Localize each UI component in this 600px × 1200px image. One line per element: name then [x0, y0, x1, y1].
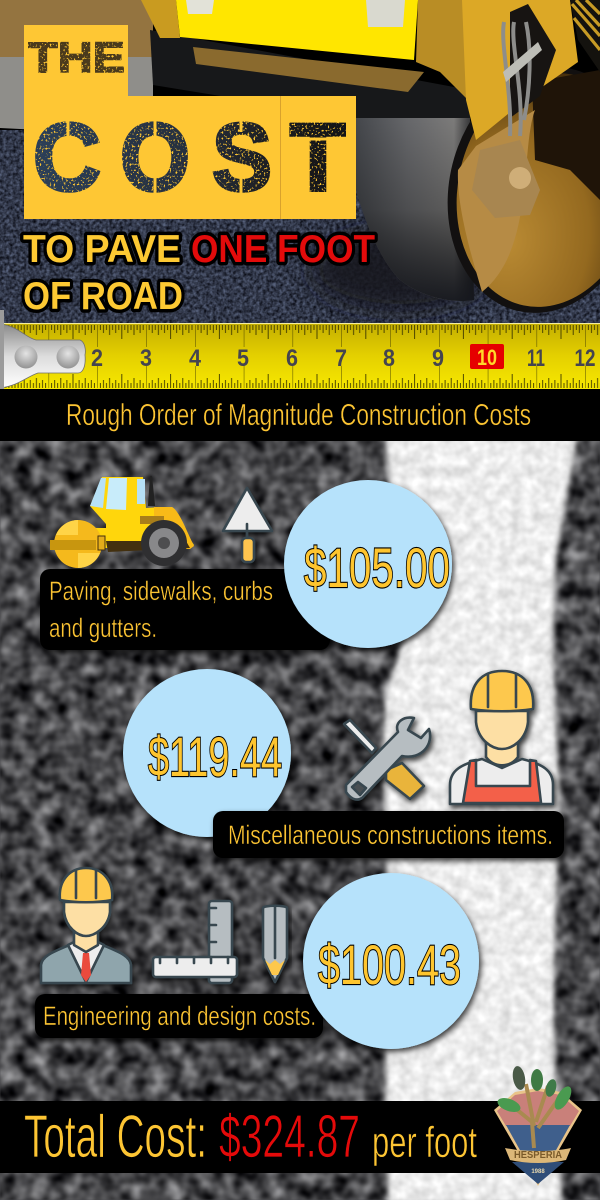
word: COST: S [212, 104, 272, 211]
price circle: $119.44: $119.44 [148, 725, 282, 788]
subtitle: to pave one foot of road: ONE FOOT [191, 228, 375, 271]
panel: paving costs [40, 476, 452, 650]
inch numbers: 11 [527, 345, 545, 372]
icon: rulers [153, 901, 237, 983]
yellow stencil plate [24, 25, 356, 219]
inch numbers: 9 [432, 345, 444, 372]
grating [570, 0, 600, 72]
metal hook [0, 324, 85, 388]
machine side strip [141, 0, 180, 38]
white road stripe [382, 436, 578, 1200]
price circle: $105.00: $105.00 [304, 536, 450, 599]
word: COST [33, 104, 346, 211]
icon: road roller [50, 476, 194, 568]
inch numbers: 8 [383, 345, 395, 372]
word: COST: C [33, 104, 101, 211]
word: COST: T [290, 104, 346, 211]
logo: Hesperia emblem: 1988 [531, 1169, 545, 1175]
logo: Hesperia emblem [494, 1065, 582, 1186]
price circle: $119.44 [123, 669, 291, 837]
panel: engineering and design [35, 868, 479, 1049]
total label: Total Cost: [24, 1103, 207, 1170]
icon: pencil [263, 906, 287, 982]
total cost band [0, 1101, 600, 1173]
red 10 marker [470, 344, 504, 370]
inch numbers: 3 [140, 345, 152, 372]
arm plate [462, 0, 578, 140]
price circle: $100.43: $100.43 [318, 933, 461, 996]
title block [24, 25, 356, 219]
caption: paving: and gutters. [49, 613, 157, 643]
heading band [0, 389, 600, 441]
hydraulic slot [510, 4, 556, 118]
asphalt background [0, 440, 600, 1200]
price circle: $100.43 [303, 873, 479, 1049]
panel: miscellaneous items [123, 669, 564, 858]
inch numbers [91, 345, 596, 372]
headlights [186, 0, 214, 14]
caption: paving: Paving, sidewalks, curbs [49, 576, 273, 606]
inch numbers: 2 [91, 345, 103, 372]
concrete and wall backdrop [0, 57, 153, 131]
tape measure [0, 310, 600, 404]
per foot: per foot [372, 1118, 477, 1167]
joshua tree [496, 1065, 575, 1148]
red 10 marker: 10 [477, 345, 497, 370]
upper frame [416, 0, 468, 100]
total value: $324.87 [219, 1103, 360, 1170]
machine dark chassis [150, 30, 470, 135]
hero photo: road roller on asphalt [0, 0, 600, 331]
drum ground shadow [310, 228, 490, 312]
wheel [425, 49, 600, 331]
subtitle: to pave one foot of road: OF ROAD [23, 275, 183, 318]
subtitle: to pave one foot of road [23, 228, 375, 318]
caption: engineering: Engineering and design costs. [43, 1001, 316, 1031]
icon: construction worker [450, 671, 553, 804]
icon: engineer [41, 868, 131, 983]
inch numbers: 4 [189, 345, 202, 372]
word: THE: THE [28, 34, 125, 82]
subtitle: to pave one foot of road: TO PAVE [23, 228, 181, 271]
asphalt foreground [0, 130, 600, 323]
word: COST: O [120, 104, 190, 211]
bronze bar [193, 47, 424, 92]
caption: paving [40, 569, 330, 650]
logo: Hesperia emblem: HESPERIA [514, 1150, 562, 1161]
yellow body panel [176, 0, 418, 60]
price circle: $105.00 [284, 480, 452, 648]
caption: miscellaneous [213, 811, 564, 858]
drum [340, 118, 474, 301]
inch numbers: 5 [237, 345, 249, 372]
hydraulic tubes [503, 22, 530, 136]
inch numbers: 7 [335, 345, 347, 372]
inch numbers: 6 [286, 345, 298, 372]
caption: engineering [35, 994, 323, 1038]
icon: trowel [223, 488, 272, 562]
icon: screwdriver and wrench [344, 718, 430, 800]
